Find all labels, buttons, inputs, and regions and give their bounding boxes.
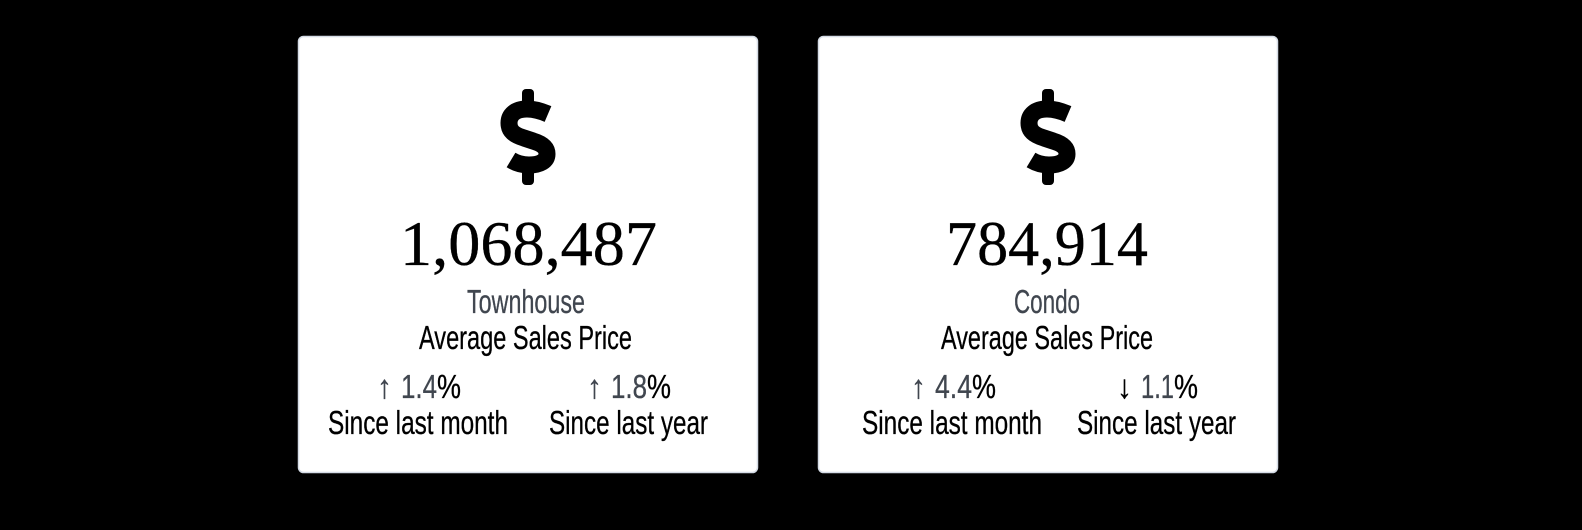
label: condo: Condo (1014, 283, 1080, 320)
stat: monthly change: Since last month (328, 404, 508, 441)
stat: monthly change: ↑ (911, 368, 926, 405)
stat: monthly change: 1.4 (401, 368, 437, 405)
stat: monthly change: 4.4 (935, 368, 972, 405)
stat: monthly change: % (972, 368, 996, 405)
stat: yearly change: 1.8 (611, 368, 647, 405)
stat: monthly change: ↑ (377, 368, 392, 405)
stat: monthly change: % (437, 368, 461, 405)
stat: monthly change (328, 368, 508, 441)
stat: yearly change: ↑ (587, 368, 602, 405)
icon: dollar sign (509, 89, 548, 185)
stat: yearly change: 1.1 (1141, 368, 1174, 405)
stat: yearly change: Since last year (549, 404, 708, 441)
panel: condo (818, 36, 1278, 472)
label: average sales price: Average Sales Price (419, 319, 632, 356)
label: townhouse: Townhouse (467, 283, 585, 320)
stat: yearly change (549, 368, 708, 441)
icon: dollar sign (1029, 89, 1068, 185)
value: townhouse price: 1,068,487 (400, 208, 657, 279)
value: condo price: 784,914 (946, 208, 1148, 279)
stat: yearly change: % (1174, 368, 1198, 405)
stat: monthly change (862, 368, 1042, 441)
stat: yearly change (1077, 368, 1236, 441)
stat: monthly change: Since last month (862, 404, 1042, 441)
label: average sales price: Average Sales Price (941, 319, 1153, 356)
stat: yearly change: Since last year (1077, 404, 1236, 441)
panel: townhouse (298, 36, 758, 472)
stat: yearly change: ↓ (1117, 368, 1132, 405)
stat: yearly change: % (647, 368, 671, 405)
